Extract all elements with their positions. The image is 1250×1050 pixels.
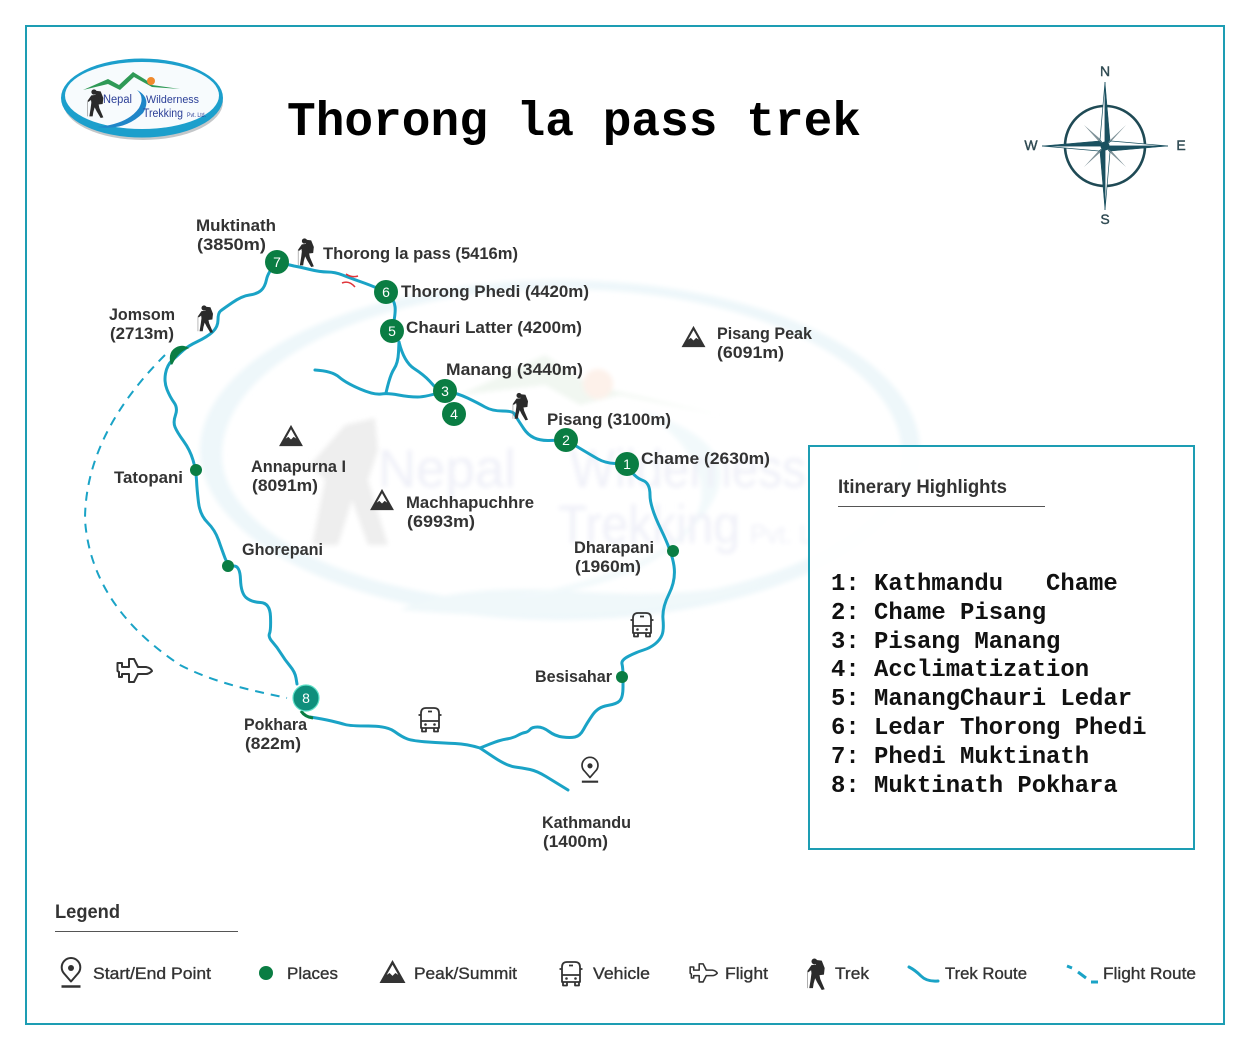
flight route	[85, 355, 287, 698]
panel: itinerary highlights: Itinerary Highlights	[838, 477, 1007, 498]
place labels: Tatopani	[114, 468, 183, 487]
background watermark logo	[200, 280, 920, 620]
background watermark logo: Trekking	[558, 495, 740, 555]
numbered stops: 5	[388, 323, 396, 339]
numbered stops: 4	[450, 406, 458, 422]
place labels: Ghorepani	[242, 540, 323, 559]
logo: Nepal Wilderness Trekking: Nepal	[103, 94, 132, 106]
legend: Start/End Point	[93, 964, 211, 983]
place labels: (8091m)	[252, 476, 318, 495]
panel: itinerary highlights: 2: Chame Pisang	[831, 600, 1046, 627]
panel: itinerary highlights: 1: Kathmandu Chame	[831, 571, 1118, 598]
logo: Nepal Wilderness Trekking	[61, 58, 223, 140]
place dots	[190, 464, 679, 683]
panel: itinerary highlights: 8: Muktinath Pokhara	[831, 773, 1118, 800]
compass rose: N	[1100, 63, 1110, 79]
place labels: Pisang Peak	[717, 324, 813, 343]
panel: itinerary highlights: 3: Pisang Manang	[831, 629, 1060, 656]
numbered stops: 1	[623, 456, 631, 472]
place labels: Pisang (3100m)	[547, 410, 671, 429]
place labels: (2713m)	[110, 324, 174, 343]
logo: Nepal Wilderness Trekking: Trekking	[143, 106, 183, 120]
place labels: Kathmandu	[542, 813, 631, 832]
trek routes	[165, 262, 674, 790]
panel: itinerary highlights: 7: Phedi Muktinath	[831, 744, 1089, 771]
title: Thorong la pass trek	[287, 96, 861, 150]
numbered stops: 6	[382, 284, 390, 300]
panel: itinerary highlights: 5: ManangChauri Ledar	[831, 686, 1132, 713]
legend: Peak/Summit	[414, 964, 517, 983]
background watermark logo: Wilderness	[570, 439, 806, 499]
panel: itinerary highlights	[809, 446, 1194, 849]
place labels: Muktinath	[196, 216, 276, 235]
legend: Places	[287, 964, 338, 983]
place labels: Chauri Latter (4200m)	[406, 318, 582, 337]
place labels: (3850m)	[197, 235, 266, 254]
place labels: Thorong Phedi (4420m)	[401, 282, 589, 301]
panel: itinerary highlights: 6: Ledar Thorong Phedi	[831, 715, 1146, 742]
place labels: Annapurna I	[251, 457, 346, 476]
compass rose	[1024, 63, 1186, 227]
place labels: Pokhara	[244, 715, 308, 734]
logo: Nepal Wilderness Trekking: Pvt. Ltd.	[187, 113, 206, 119]
place labels: Dharapani	[574, 538, 654, 557]
place labels: Besisahar	[535, 667, 612, 686]
numbered stops: 8	[302, 690, 310, 706]
background watermark logo: Nepal	[378, 439, 516, 499]
legend: Vehicle	[593, 964, 650, 983]
numbered stops: 3	[441, 383, 449, 399]
place labels: (6993m)	[407, 512, 475, 531]
legend: Trek	[835, 964, 870, 983]
place labels: (6091m)	[717, 343, 784, 362]
vehicle and flight icons on map	[118, 613, 654, 782]
numbered stops	[265, 250, 639, 718]
place labels: Chame (2630m)	[641, 449, 770, 468]
place labels	[109, 216, 813, 851]
background watermark logo: Pvt. Ltd.	[750, 519, 840, 549]
numbered stops: 7	[273, 254, 281, 270]
compass rose: S	[1100, 211, 1110, 227]
place labels: Manang (3440m)	[446, 360, 583, 379]
legend: Trek Route	[945, 964, 1027, 983]
peak icons on map	[279, 326, 705, 510]
legend: Flight Route	[1103, 964, 1196, 983]
panel: itinerary highlights: 4: Acclimatization	[831, 657, 1089, 684]
legend: Flight	[725, 964, 768, 983]
compass rose: E	[1176, 137, 1186, 153]
numbered stops: 2	[562, 432, 570, 448]
Jomsom marker	[170, 346, 188, 364]
legend: Legend	[55, 902, 120, 923]
place labels: (1960m)	[575, 557, 641, 576]
pass marker	[342, 274, 358, 287]
hiker icons on map	[198, 238, 528, 420]
compass rose: W	[1024, 137, 1038, 153]
place labels: Thorong la pass (5416m)	[323, 244, 518, 263]
place labels: (822m)	[245, 734, 301, 753]
logo: Nepal Wilderness Trekking: Wilderness	[146, 94, 199, 106]
legend	[55, 902, 1196, 990]
place labels: (1400m)	[543, 832, 608, 851]
place labels: Machhapuchhre	[406, 493, 534, 512]
place labels: Jomsom	[109, 305, 175, 324]
